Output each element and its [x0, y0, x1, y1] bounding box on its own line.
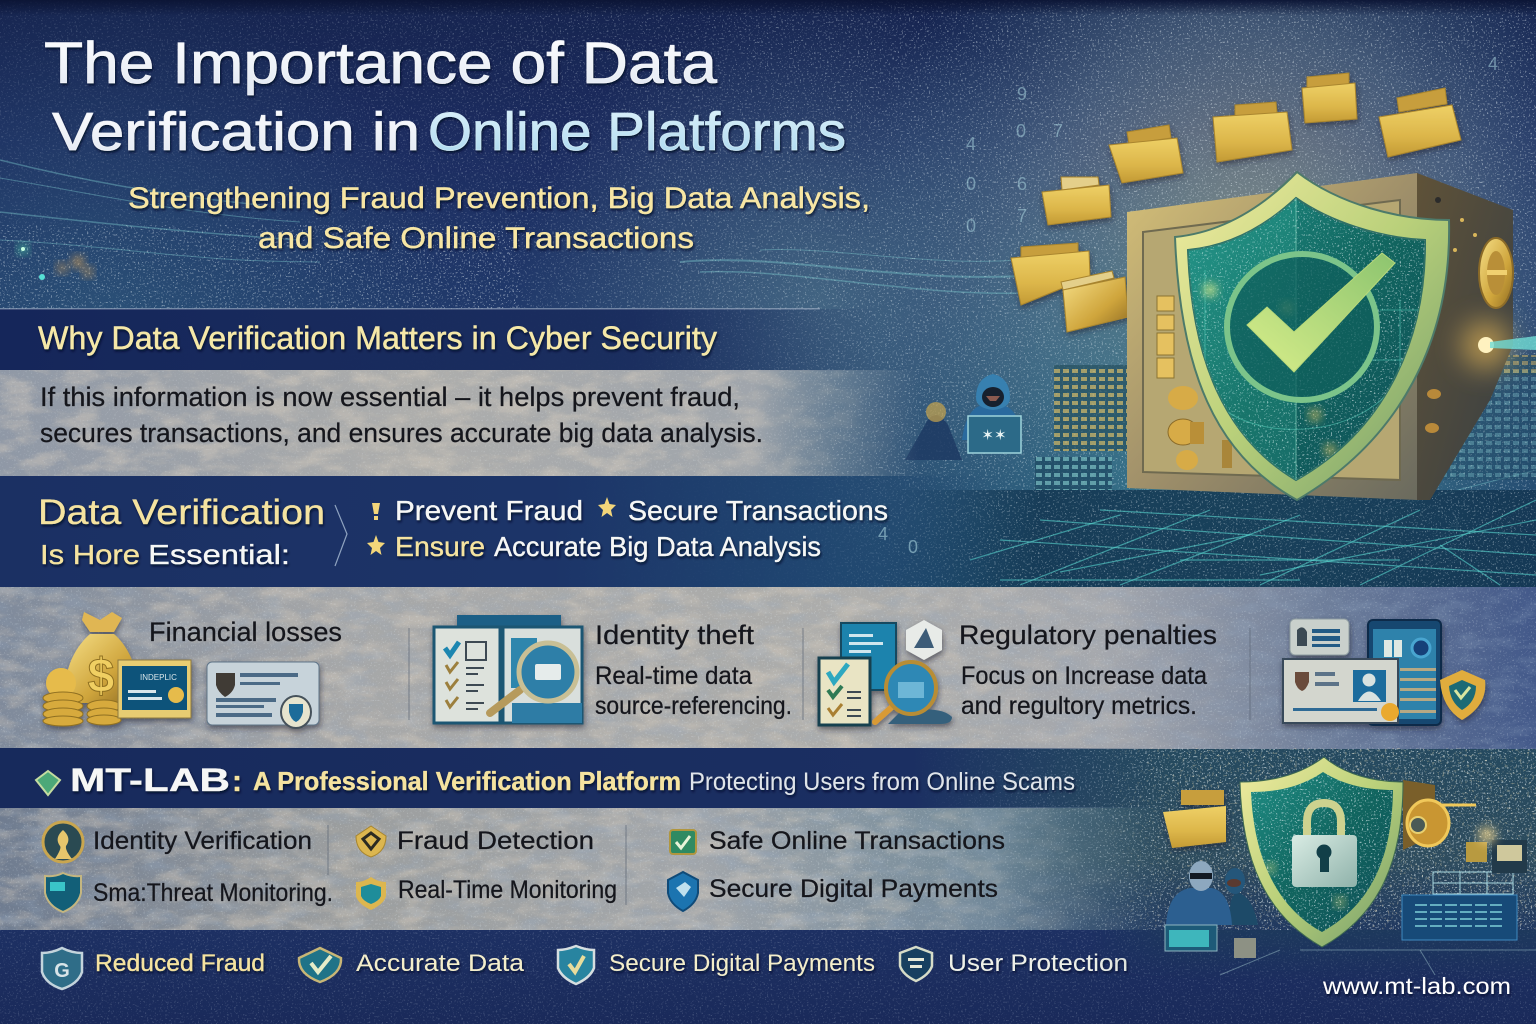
description: real-time data: Real-time data — [595, 662, 752, 690]
background: digital data field: 4 — [966, 134, 976, 154]
website url: www.mt-lab.com — [1322, 973, 1511, 999]
subheading: is hore essential — [40, 539, 290, 570]
benefit: user protection: User Protection — [948, 950, 1128, 977]
benefit: reduced fraud — [42, 948, 265, 989]
panel: data verification is essential — [0, 476, 1000, 587]
feature: secure digital payments — [668, 872, 998, 911]
label: financial losses: Financial losses — [149, 617, 342, 647]
description: focus on increase data — [961, 662, 1207, 720]
brand name: MT-LAB: : — [232, 765, 242, 798]
icon: flying gold folders — [1011, 73, 1461, 332]
list item: secure transactions: Secure Transactions — [628, 495, 888, 526]
heading: why data verification matters: Why Data Verification Matters in Cyber Security — [38, 320, 717, 356]
benefit: user protection — [900, 947, 1128, 981]
background: digital data field: 9 — [1017, 84, 1027, 104]
label: regulatory penalties: Regulatory penalties — [959, 620, 1217, 650]
floating digits: 0 — [908, 537, 918, 557]
subheading: is hore essential: Is Hore — [40, 539, 140, 570]
icon: gold folder — [1163, 790, 1226, 848]
benefit: reduced fraud: Reduced Fraud — [95, 950, 265, 977]
icon: money bag, coins and cards: $ — [88, 650, 115, 703]
icon: exclamation marker — [372, 503, 380, 520]
icon: MT-LAB emblem — [36, 771, 60, 795]
background: digital data field: 0 — [1016, 121, 1026, 141]
city and circuit floor — [880, 355, 1536, 590]
description: focus on increase data: and regultory metrics. — [961, 692, 1197, 720]
subtitle — [128, 182, 870, 255]
floating digits — [878, 524, 918, 557]
main title — [44, 31, 846, 162]
heading: data verification: Data Verification — [38, 493, 325, 532]
panel: why data verification matters — [0, 308, 880, 371]
background: digital data field: 6 — [1017, 174, 1027, 194]
subheading: is hore essential: Essential: — [148, 539, 290, 570]
panel: risks band — [0, 587, 1536, 749]
subtitle: Strengthening Fraud Prevention, Big Data Analysis, — [128, 182, 870, 215]
main title: Verification in — [52, 102, 420, 162]
feature: fraud detection — [356, 826, 594, 857]
background: digital data field: 0 — [966, 174, 976, 194]
benefit: secure digital payments — [558, 946, 875, 984]
icon: padlock shield — [1240, 757, 1403, 947]
icon: hacker at laptop: ✶✶ — [981, 427, 1007, 444]
icon: compliance documents and magnifier — [819, 620, 952, 725]
body text: why it is essential — [40, 382, 763, 448]
main title: Online Platforms — [428, 102, 846, 162]
feature: real-time monitoring: Real-Time Monitoring — [398, 876, 617, 904]
feature: fraud detection: Fraud Detection — [397, 827, 594, 855]
brand name: MT-LAB: MT-LAB — [70, 762, 230, 798]
list item: ensure accurate big data analysis: Accurate Big Data Analysis — [494, 531, 821, 562]
label: identity theft: Identity theft — [595, 620, 755, 650]
background: digital data field: 7 — [1053, 121, 1063, 141]
feature: identity verification — [43, 822, 312, 862]
icon: money bag, coins and cards — [43, 612, 319, 728]
main title: The Importance of Data — [44, 31, 718, 96]
icon: chevron divider — [335, 505, 347, 566]
list item: prevent fraud: Prevent Fraud — [395, 495, 583, 526]
city and data scene — [1090, 748, 1536, 980]
icon: operators at terminal — [1165, 861, 1258, 958]
panel: essential information band — [0, 370, 920, 476]
feature: threat monitoring: Sma:Threat Monitoring. — [93, 879, 333, 907]
description: focus on increase data: Focus on Increase data — [961, 662, 1207, 690]
heading: professional verification platform: A Professional Verification Platform — [253, 766, 681, 796]
icon: checklist and magnifier — [434, 615, 582, 723]
icon: hacker at laptop — [905, 374, 1022, 460]
body text: why it is essential: secures transactions, and ensures accurate big data analysis. — [40, 418, 763, 448]
lens flare — [1462, 321, 1536, 369]
benefit: accurate data: Accurate Data — [356, 950, 525, 977]
icon: money bag, coins and cards: INDEPLIC — [140, 673, 177, 682]
icon: glowing check shield — [1175, 172, 1449, 500]
panel: platform features — [0, 807, 1170, 930]
feature: secure digital payments: Secure Digital Payments — [709, 875, 998, 903]
list item: ensure accurate big data analysis: Ensure — [395, 531, 485, 562]
background: digital data field: 7 — [1017, 206, 1027, 226]
tagline: protecting users from online scams: Protecting Users from Online Scams — [689, 768, 1075, 796]
background: digital data field: 4 — [1488, 54, 1498, 74]
hero illustration: data safe behind verification shield — [880, 73, 1536, 590]
icon: star — [598, 497, 616, 517]
feature: threat monitoring — [45, 873, 333, 912]
illustration: padlock shield and operators — [1090, 748, 1536, 980]
icon: vault safe — [1127, 173, 1513, 500]
icon: digital ID cards and tablet — [1283, 619, 1485, 725]
benefit: accurate data — [299, 948, 525, 982]
feature: safe online transactions: Safe Online Transactions — [709, 827, 1005, 855]
panel: MT-LAB heading band — [0, 748, 1170, 808]
benefit: secure digital payments: Secure Digital Payments — [609, 950, 875, 977]
subtitle: and Safe Online Transactions — [258, 222, 694, 255]
floating digits: 4 — [878, 524, 888, 544]
icon: star second row — [367, 535, 385, 555]
panel: benefits footer — [0, 930, 1536, 1024]
background: digital data field: 0 — [966, 216, 976, 236]
description: real-time data — [595, 662, 792, 720]
background: digital data field: 4 — [1450, 514, 1460, 534]
description: real-time data: source-referencing. — [595, 692, 792, 720]
feature: real-time monitoring — [356, 876, 617, 910]
icon: gold lens — [1403, 780, 1476, 850]
body text: why it is essential: If this information is now essential – it helps prevent fraud, — [40, 382, 740, 412]
feature: identity verification: Identity Verification — [93, 827, 312, 855]
benefit: reduced fraud: G — [54, 960, 70, 982]
